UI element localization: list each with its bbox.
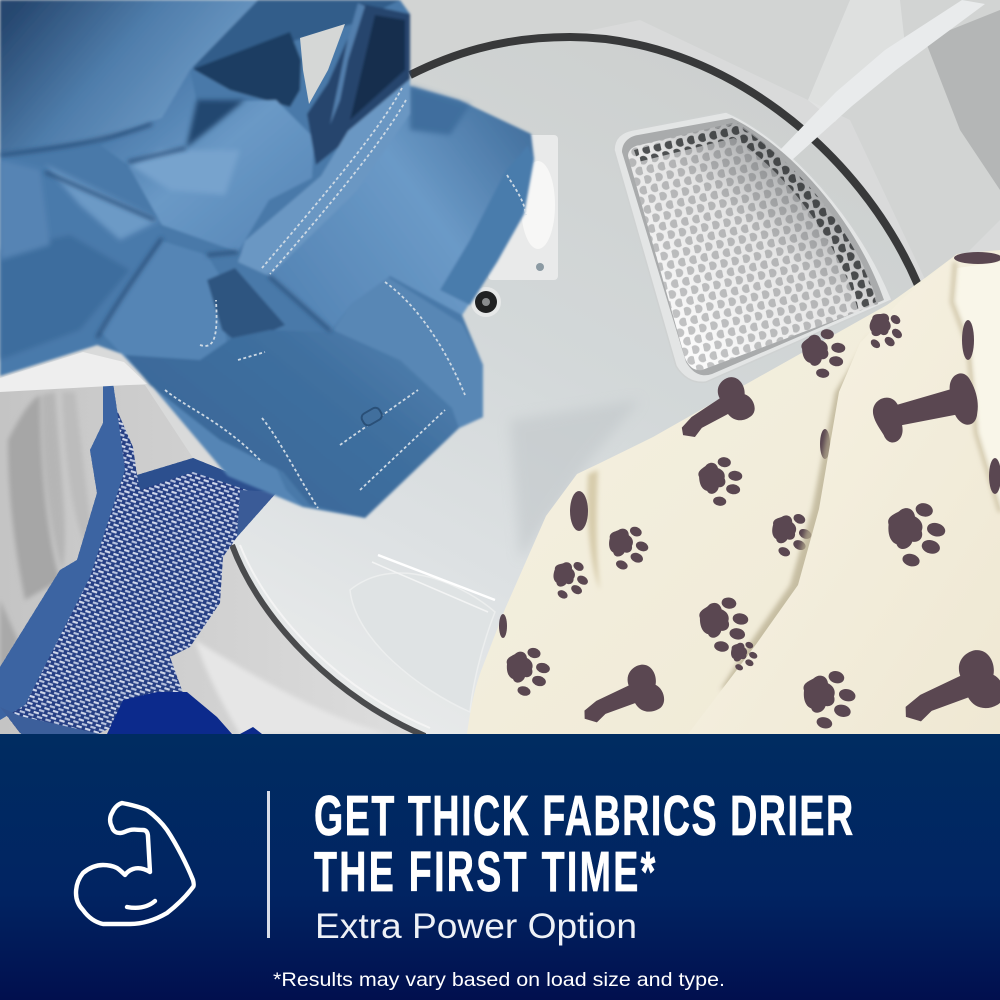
print: back layer partial marks (570, 491, 588, 531)
crease lines (0, 124, 331, 338)
knob (471, 287, 501, 317)
lower door lens highlight (350, 573, 495, 712)
print: edge marks (962, 320, 974, 360)
print: front layer paws (888, 501, 947, 568)
blue knit towel (0, 383, 277, 735)
fold shadow along front edge (720, 335, 870, 690)
divider (267, 791, 270, 938)
footnote: *Results may vary based on load size and type. (273, 970, 725, 991)
drum gap between cloth folds (300, 24, 345, 104)
white drum vane (0, 352, 147, 392)
drying rack arm (780, 0, 985, 160)
upper right drum wall (400, 0, 1000, 290)
heading: GET THICK FABRICS DRIER (314, 784, 853, 848)
navy cloth (107, 692, 262, 734)
lint screen (614, 112, 892, 382)
dark gasket: top (410, 37, 918, 285)
bottom banner (0, 734, 1000, 1000)
heading: THE FIRST TIME* (314, 840, 655, 904)
door panel (200, 37, 1000, 740)
cream towel with paw print (467, 250, 1000, 736)
icon: flexed arm muscle (76, 803, 194, 924)
shade by towel (510, 400, 640, 560)
upper right fold (953, 262, 1000, 509)
front towel fold (688, 252, 1000, 734)
dark gasket: bottom (232, 545, 425, 736)
photo: dryer drum interior (0, 0, 1000, 740)
print: back layer paws (696, 453, 747, 510)
denim shirt (0, 0, 534, 518)
stitching (165, 88, 526, 508)
cloth body (0, 0, 534, 518)
button loop (360, 406, 384, 427)
print: back layer bones (669, 372, 759, 449)
heading (314, 784, 853, 904)
towel edge band (0, 383, 125, 720)
sensor bracket (488, 135, 558, 280)
print: front layer bones (869, 371, 982, 445)
lower left drum wall (0, 385, 420, 734)
subheading: Extra Power Option (315, 906, 637, 946)
towel fold shadow: left (587, 470, 600, 590)
